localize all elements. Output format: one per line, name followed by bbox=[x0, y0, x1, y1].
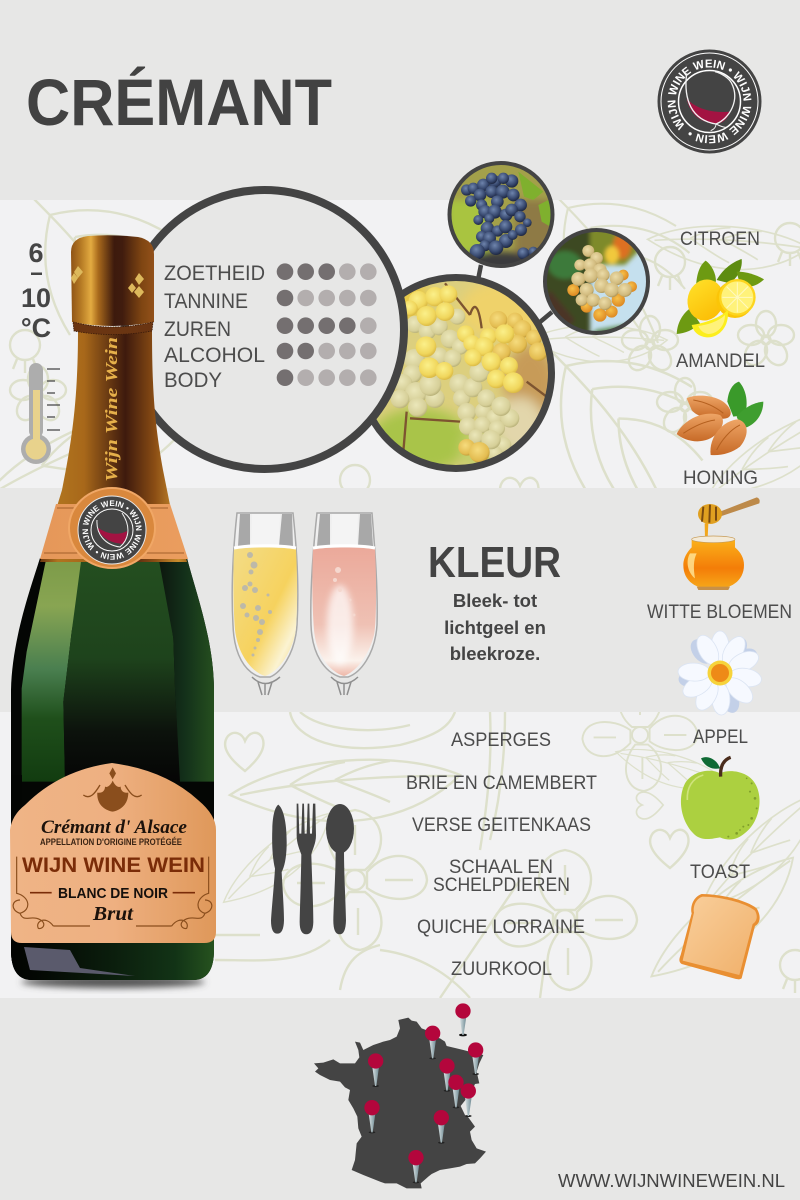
aroma label: witte bloemen: WITTE BLOEMEN bbox=[647, 602, 792, 623]
heading: kleur: KLEUR bbox=[428, 538, 561, 587]
food pairing list: BRIE EN CAMEMBERT bbox=[406, 773, 597, 794]
bottle label: WIJN WINE WEIN bbox=[22, 854, 205, 877]
colour description: Bleek- tot bbox=[453, 590, 537, 611]
food pairing list: SCHAAL EN bbox=[449, 857, 553, 878]
bottle shadow bbox=[21, 976, 205, 988]
icon: green apple bbox=[681, 757, 760, 839]
panel: patterned band pairing bbox=[0, 712, 800, 998]
icon: honey jar bbox=[683, 497, 760, 590]
aroma label: appel: APPEL bbox=[693, 727, 748, 748]
serving temperature bbox=[21, 238, 51, 343]
taste labels: ALCOHOL bbox=[164, 344, 265, 367]
map pins bbox=[364, 1003, 483, 1183]
champagne flute: rosé bbox=[311, 513, 377, 695]
champagne flute: white bbox=[232, 513, 298, 695]
title: CRÉMANT bbox=[26, 65, 332, 139]
panel: taste profile circle bbox=[125, 190, 404, 469]
photo: golden grapes on vine bbox=[543, 228, 650, 335]
aroma label: citroen: CITROEN bbox=[680, 229, 760, 250]
website url: WWW.WIJNWINEWEIN.NL bbox=[558, 1171, 785, 1191]
food pairing list: SCHELPDIEREN bbox=[433, 875, 570, 896]
logo: wijn wine wein: WIJN WINE WEIN • WIJN WINE WEIN • bbox=[668, 60, 752, 144]
neck script: Wijn Wine Wein bbox=[102, 337, 121, 482]
food pairing list bbox=[406, 730, 597, 980]
logo: wijn wine wein bbox=[658, 50, 762, 154]
icon: cutlery bbox=[271, 804, 354, 934]
bottle label: Brut bbox=[92, 903, 135, 925]
bottle bbox=[10, 235, 216, 994]
bottle label bbox=[10, 763, 216, 943]
taste rating dots bbox=[277, 263, 377, 386]
connectors between grape photos bbox=[478, 265, 552, 322]
bottle glass bbox=[11, 558, 214, 980]
thermometer bbox=[21, 363, 60, 464]
bottle label: BLANC DE NOIR bbox=[58, 886, 169, 902]
photo: blue grapes bbox=[445, 160, 557, 272]
food pairing list: QUICHE LORRAINE bbox=[417, 917, 585, 938]
photo: white grapes large bbox=[372, 274, 555, 472]
colour description bbox=[444, 590, 546, 664]
bottle label: Crémant d' Alsace bbox=[41, 817, 188, 838]
icon: white daisy bbox=[677, 631, 763, 716]
taste labels: TANNINE bbox=[164, 290, 248, 313]
aroma label: honing: HONING bbox=[683, 468, 758, 489]
icon: almonds bbox=[677, 382, 763, 455]
foil cap top bbox=[71, 235, 154, 326]
foil capsule neck bbox=[40, 330, 187, 562]
collar band bbox=[40, 504, 188, 559]
label frame and scrolls bbox=[13, 857, 212, 929]
label ornament bbox=[83, 767, 142, 812]
colour description: bleekroze. bbox=[450, 643, 540, 664]
serving temperature: 6 bbox=[28, 238, 44, 268]
food pairing list: ZUURKOOL bbox=[451, 959, 552, 980]
taste labels: ZOETHEID bbox=[164, 262, 265, 285]
cap diamonds bbox=[71, 266, 144, 298]
aroma label: amandel: AMANDEL bbox=[676, 351, 765, 372]
food pairing list: VERSE GEITENKAAS bbox=[412, 815, 591, 836]
map of france with crémant regions bbox=[314, 1003, 486, 1188]
taste labels bbox=[164, 262, 265, 392]
serving temperature: °C bbox=[21, 313, 51, 343]
aroma label: toast: TOAST bbox=[690, 862, 750, 883]
icon: toast bbox=[679, 894, 760, 979]
icon: lemon bbox=[677, 259, 764, 337]
collar medallion: WIJN WINE WEIN • WIJN WINE WEIN • bbox=[82, 500, 142, 560]
bottle label: APPELLATION D'ORIGINE PROTÉGÉE bbox=[40, 837, 182, 847]
taste labels: ZUREN bbox=[164, 318, 231, 341]
colour description: lichtgeel en bbox=[444, 617, 546, 638]
taste labels: BODY bbox=[164, 369, 222, 392]
food pairing list: ASPERGES bbox=[451, 730, 551, 751]
panel: patterned band top bbox=[0, 200, 800, 488]
serving temperature: 10 bbox=[21, 283, 51, 313]
